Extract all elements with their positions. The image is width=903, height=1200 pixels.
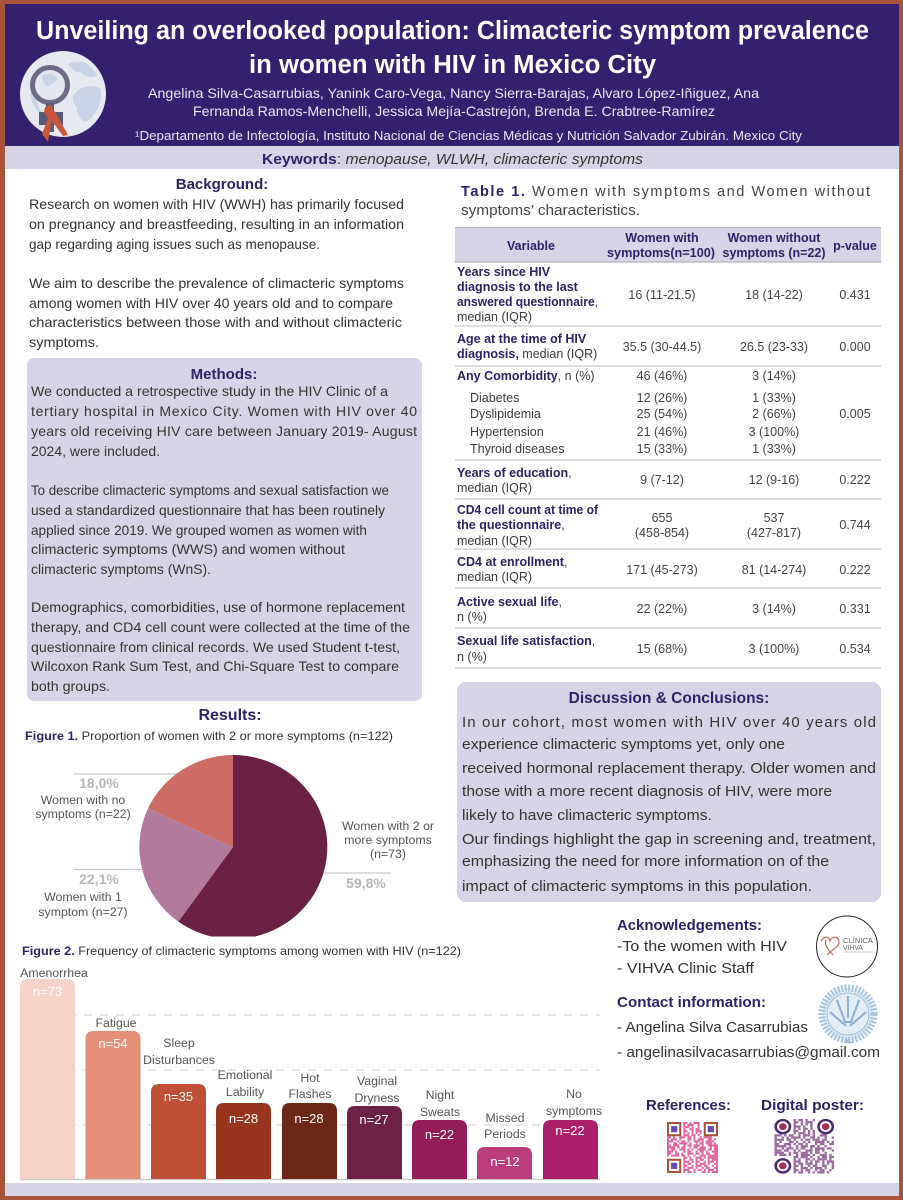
table: characteristics of women with and without symptoms bbox=[455, 227, 881, 668]
text block: methods bbox=[31, 383, 417, 694]
contact information bbox=[617, 994, 880, 1061]
row: CD4 at enrollment: 171 (45-273) bbox=[626, 563, 698, 577]
table header: symptoms (n=22) bbox=[722, 246, 826, 260]
label: one symptom bbox=[38, 871, 128, 919]
acknowledgements: -To the women with HIV bbox=[617, 939, 787, 955]
row: sexual life satisfaction bbox=[457, 634, 871, 664]
row: any comorbidity: 12 (26%) bbox=[637, 391, 687, 405]
icon: QR code references bbox=[667, 1123, 718, 1172]
digital poster QR code: Digital poster: bbox=[761, 1097, 864, 1114]
label: two or more symptoms: Women with 2 or bbox=[342, 819, 434, 833]
text block: methods: years old receiving HIV care between January 2019- August bbox=[31, 423, 417, 439]
row: sexual life satisfaction: 3 (100%) bbox=[749, 642, 799, 656]
label: no symptoms bbox=[35, 775, 131, 821]
row: any comorbidity: Hypertension bbox=[470, 425, 544, 439]
label: two or more symptoms bbox=[342, 819, 434, 891]
row: any comorbidity: Thyroid diseases bbox=[470, 442, 564, 456]
bar: no symptoms: symptoms bbox=[546, 1104, 602, 1118]
references QR code: References: bbox=[646, 1097, 731, 1114]
text block: methods: 2024, were included. bbox=[31, 443, 160, 459]
bar: sleep disturbances: n=35 bbox=[164, 1089, 193, 1104]
row: CD4 at questionnaire: 0.744 bbox=[839, 518, 871, 532]
bar: vaginal dryness: Vaginal bbox=[357, 1074, 397, 1088]
text block: background: characteristics between those with and without climacteric bbox=[29, 314, 402, 330]
row: any comorbidity: 21 (46%) bbox=[637, 425, 687, 439]
bar: vaginal dryness: n=27 bbox=[359, 1112, 389, 1127]
text block: background: on pregnancy and breastfeeding, resulting in an information bbox=[29, 216, 404, 232]
row: CD4 at questionnaire: the questionnaire, bbox=[457, 518, 565, 532]
bar: fatigue bbox=[86, 1016, 140, 1179]
bar chart: frequency of climacteric symptoms bbox=[20, 966, 602, 1180]
label: no symptoms: 18,0% bbox=[79, 775, 119, 791]
table header: Variable bbox=[507, 239, 555, 253]
row: years since diagnosis bbox=[457, 265, 871, 324]
row: years of education bbox=[457, 466, 871, 495]
text block: discussion: likely to have climacteric symptoms. bbox=[462, 807, 712, 824]
row: CD4 at enrollment bbox=[457, 555, 871, 584]
pie slice: 2 or more symptoms bbox=[178, 755, 327, 939]
bar: emotional lability bbox=[216, 1068, 272, 1179]
acknowledgements bbox=[617, 917, 787, 977]
bar: fatigue: Fatigue bbox=[95, 1016, 137, 1030]
text block: discussion: received hormonal replacement therapy. Older women and bbox=[462, 760, 876, 777]
affiliation: ¹Departamento de Infectología, Instituto Nacional de Ciencias Médicas y Nutrición Salvador Zubirán. Mexico City bbox=[135, 128, 803, 143]
heading: discussion: Discussion & Conclusions: bbox=[569, 690, 769, 707]
bar: night sweats bbox=[412, 1088, 467, 1179]
table header: p-value bbox=[833, 239, 877, 253]
text block: background: gap regarding aging issues such as menopause. bbox=[29, 236, 320, 252]
row: years since diagnosis: 18 (14-22) bbox=[745, 288, 803, 302]
bar: hot flashes: Flashes bbox=[288, 1087, 332, 1101]
text block: background: symptoms. bbox=[29, 334, 99, 350]
row: active sexual life: Active sexual life, bbox=[457, 595, 562, 609]
row: CD4 at enrollment: 0.222 bbox=[839, 563, 871, 577]
row: CD4 at enrollment: 81 (14-274) bbox=[742, 563, 806, 577]
contact information: - angelinasilvacasarrubias@gmail.com bbox=[617, 1045, 880, 1061]
row: age at diagnosis: 0.000 bbox=[839, 340, 871, 354]
label: two or more symptoms: more symptoms bbox=[344, 833, 432, 847]
row: any comorbidity: 15 (33%) bbox=[637, 442, 687, 456]
row: any comorbidity: 3 (14%) bbox=[752, 369, 796, 383]
icon: clinica vihva logo: VIHVA bbox=[843, 945, 863, 952]
heading: results: Results: bbox=[198, 707, 262, 724]
row: years since diagnosis: Years since HIV bbox=[457, 265, 551, 279]
label: one symptom: Women with 1 bbox=[44, 890, 122, 904]
text block: methods: tertiary hospital in Mexico City. Women with HIV over 40 bbox=[31, 403, 417, 419]
row: any comorbidity: 2 (66%) bbox=[752, 407, 796, 421]
row: any comorbidity: 25 (54%) bbox=[637, 407, 687, 421]
row: active sexual life: 3 (14%) bbox=[752, 602, 796, 616]
row: sexual life satisfaction: 0.534 bbox=[839, 642, 871, 656]
bar: missed periods: Periods bbox=[484, 1127, 526, 1141]
row: active sexual life: 22 (22%) bbox=[637, 602, 687, 616]
row: years since diagnosis: answered questionnaire, bbox=[457, 295, 598, 309]
acknowledgements: Acknowledgements: bbox=[617, 917, 762, 934]
row: any comorbidity: Any Comorbidity, n (%) bbox=[457, 369, 595, 383]
bar: missed periods: Missed bbox=[486, 1111, 525, 1125]
text block: discussion: experience climacteric symptoms yet, only one bbox=[462, 736, 785, 753]
header banner bbox=[5, 4, 899, 146]
bar: amenorrhea bbox=[20, 966, 88, 1179]
title bbox=[36, 17, 869, 79]
text block: discussion: those with a more recent diagnosis of HIV, were more bbox=[462, 783, 832, 800]
row: years since diagnosis: diagnosis to the last bbox=[457, 280, 579, 294]
contact information: Contact information: bbox=[617, 994, 766, 1011]
label: one symptom: symptom (n=27) bbox=[38, 905, 128, 919]
bar: no symptoms: No bbox=[566, 1087, 582, 1101]
text block: background: We aim to describe the prevalence of climacteric symptoms bbox=[29, 275, 404, 291]
row: years of education: Years of education, bbox=[457, 466, 572, 480]
row: CD4 at questionnaire bbox=[457, 503, 871, 548]
contact information: - Angelina Silva Casarrubias bbox=[617, 1020, 808, 1036]
bar: hot flashes bbox=[282, 1071, 337, 1179]
row: age at diagnosis: diagnosis, median (IQR) bbox=[457, 347, 597, 361]
bar: amenorrhea: n=73 bbox=[33, 984, 62, 999]
bar: vaginal dryness bbox=[347, 1074, 402, 1179]
icon: clinica vihva logo: CLÍNICA bbox=[843, 936, 873, 945]
bar: emotional lability: Emotional bbox=[218, 1068, 272, 1082]
row: years of education: 12 (9-16) bbox=[749, 473, 799, 487]
icon: institutional seal bbox=[822, 988, 874, 1043]
bar: sleep disturbances bbox=[143, 1036, 215, 1179]
text block: discussion: emphasizing the need for more information on of the bbox=[462, 853, 829, 870]
references QR code bbox=[646, 1097, 731, 1172]
table header: symptoms(n=100) bbox=[607, 246, 715, 260]
bar: vaginal dryness: Dryness bbox=[354, 1091, 400, 1105]
text block: discussion: impact of climacteric symptoms in this population. bbox=[462, 878, 812, 895]
label: two or more symptoms: 59,8% bbox=[346, 875, 386, 891]
row: CD4 at questionnaire: CD4 cell count at time of bbox=[457, 503, 599, 517]
row: CD4 at questionnaire: 537 bbox=[764, 511, 784, 525]
label: no symptoms: Women with no bbox=[41, 793, 125, 807]
text block: methods: climacteric symptoms (WnS). bbox=[31, 561, 211, 577]
row: active sexual life: 0.331 bbox=[839, 602, 871, 616]
bar: amenorrhea: Amenorrhea bbox=[20, 966, 88, 980]
row: years since diagnosis: median (IQR) bbox=[457, 310, 532, 324]
table title bbox=[461, 184, 870, 219]
panel: background bbox=[29, 176, 404, 350]
text block: methods: questionnaire from clinical records. We used Student t-test, bbox=[31, 639, 400, 655]
acknowledgements: - VIHVA Clinic Staff bbox=[617, 961, 755, 977]
row: years since diagnosis: 16 (11-21.5) bbox=[628, 288, 696, 302]
pie slice: no symptoms bbox=[148, 755, 233, 847]
row: any comorbidity: 46 (46%) bbox=[637, 369, 687, 383]
row: age at diagnosis: Age at the time of HIV bbox=[457, 332, 587, 346]
icon: clinica vihva logo bbox=[816, 916, 878, 977]
panel: discussion and conclusions bbox=[457, 682, 881, 902]
bar: missed periods: n=12 bbox=[490, 1154, 520, 1169]
bar: night sweats: Sweats bbox=[420, 1105, 460, 1119]
text block: methods: Wilcoxon Rank Sum Test, and Chi-Square Test to compare bbox=[31, 658, 399, 674]
label: two or more symptoms: (n=73) bbox=[370, 847, 406, 861]
row: age at diagnosis bbox=[457, 332, 871, 361]
panel: methods bbox=[27, 358, 422, 701]
bar: hot flashes: Hot bbox=[300, 1071, 320, 1085]
row: years of education: 9 (7-12) bbox=[640, 473, 684, 487]
icon: globe with female symbol and ribbon bbox=[20, 51, 106, 142]
row: CD4 at enrollment: CD4 at enrollment, bbox=[457, 555, 567, 569]
bar: fatigue: n=54 bbox=[98, 1036, 128, 1051]
row: any comorbidity: 1 (33%) bbox=[752, 442, 796, 456]
label: no symptoms: symptoms (n=22) bbox=[35, 807, 131, 821]
heading: methods: Methods: bbox=[191, 366, 257, 383]
text block: methods: We conducted a retrospective study in the HIV Clinic of a bbox=[31, 383, 388, 399]
row: active sexual life bbox=[457, 595, 871, 624]
figure 1 caption: Figure 1. Proportion of women with 2 or more symptoms (n=122) bbox=[25, 729, 393, 743]
row: CD4 at questionnaire: (427-817) bbox=[747, 526, 801, 540]
row: any comorbidity: 0.005 bbox=[839, 407, 871, 421]
heading: background: Background: bbox=[176, 176, 268, 193]
row: any comorbidity: 3 (100%) bbox=[749, 425, 799, 439]
row: age at diagnosis: 26.5 (23-33) bbox=[740, 340, 808, 354]
table title: symptoms’ characteristics. bbox=[461, 203, 640, 219]
bar: no symptoms bbox=[543, 1087, 602, 1179]
table header: Women without bbox=[728, 231, 821, 245]
row: years since diagnosis: 0.431 bbox=[839, 288, 871, 302]
figure 2 caption: Figure 2. Frequency of climacteric symptoms among women with HIV (n=122) bbox=[22, 944, 461, 958]
title: in women with HIV in Mexico City bbox=[249, 51, 657, 79]
row: years of education: 0.222 bbox=[839, 473, 871, 487]
row: active sexual life: n (%) bbox=[457, 610, 487, 624]
row: sexual life satisfaction: 15 (68%) bbox=[637, 642, 687, 656]
text block: background: Research on women with HIV (WWH) has primarily focused bbox=[29, 196, 404, 212]
row: CD4 at questionnaire: (458-854) bbox=[635, 526, 689, 540]
text block: methods: therapy, and CD4 cell count were collected at the time of the bbox=[31, 619, 410, 635]
pie chart: proportion of women with symptoms bbox=[35, 755, 434, 939]
keywords band bbox=[5, 146, 899, 169]
keywords band: Keywords : menopause, WLWH, climacteric symptoms bbox=[262, 152, 643, 168]
text block: discussion: In our cohort, most women with HIV over 40 years old bbox=[462, 714, 876, 731]
bar: missed periods bbox=[477, 1111, 532, 1179]
title: Unveiling an overlooked population: Climacteric symptom prevalence bbox=[36, 17, 869, 45]
text block: background: among women with HIV over 40 years old and to compare bbox=[29, 295, 393, 311]
text block: discussion: Our findings highlight the gap in screening and, treatment, bbox=[462, 831, 876, 848]
text block: methods: climacteric symptoms (WWS) and women without bbox=[31, 541, 345, 557]
row: any comorbidity: Diabetes bbox=[470, 391, 519, 405]
authors: Fernanda Ramos-Menchelli, Jessica Mejía-Castrejón, Brenda E. Crabtree-Ramírez bbox=[193, 103, 715, 119]
text block: methods: both groups. bbox=[31, 678, 110, 694]
bar: sleep disturbances: Sleep bbox=[163, 1036, 195, 1050]
table title: Table 1. Women with symptoms and Women without bbox=[461, 184, 870, 200]
row: any comorbidity bbox=[457, 369, 871, 456]
bar: emotional lability: Lability bbox=[226, 1085, 265, 1099]
authors bbox=[148, 85, 759, 119]
table header bbox=[455, 227, 881, 262]
row: CD4 at enrollment: median (IQR) bbox=[457, 570, 532, 584]
row: any comorbidity: Dyslipidemia bbox=[470, 407, 541, 421]
text block: methods: Demographics, comorbidities, use of hormone replacement bbox=[31, 599, 405, 615]
bar: night sweats: n=22 bbox=[425, 1127, 454, 1142]
bar: emotional lability: n=28 bbox=[229, 1111, 258, 1126]
row: CD4 at questionnaire: median (IQR) bbox=[457, 534, 532, 548]
label: one symptom: 22,1% bbox=[79, 871, 119, 887]
bar: hot flashes: n=28 bbox=[294, 1111, 324, 1126]
row: age at diagnosis: 35.5 (30-44.5) bbox=[623, 340, 701, 354]
row: CD4 at questionnaire: 655 bbox=[652, 511, 672, 525]
bar: no symptoms: n=22 bbox=[555, 1123, 585, 1138]
authors: Angelina Silva-Casarrubias, Yanink Caro-Vega, Nancy Sierra-Barajas, Alvaro López-Iñiguez, Ana bbox=[148, 85, 759, 101]
bar: sleep disturbances: Disturbances bbox=[143, 1053, 215, 1067]
digital poster QR code bbox=[761, 1097, 864, 1172]
icon: QR code digital poster bbox=[774, 1120, 834, 1172]
table header: Women with bbox=[625, 231, 699, 245]
text block: methods: To describe climacteric symptoms and sexual satisfaction we bbox=[31, 482, 389, 498]
row: any comorbidity: 1 (33%) bbox=[752, 391, 796, 405]
row: years of education: median (IQR) bbox=[457, 481, 532, 495]
text block: methods: used a standardized questionnaire that has been routinely bbox=[31, 502, 385, 518]
text block: methods: applied since 2019. We grouped women as women with bbox=[31, 522, 367, 538]
text block: discussion bbox=[462, 714, 876, 895]
text block: background bbox=[29, 196, 404, 350]
pie slice: 1 symptom bbox=[139, 808, 233, 922]
row: sexual life satisfaction: n (%) bbox=[457, 650, 487, 664]
bar: night sweats: Night bbox=[426, 1088, 455, 1102]
row: sexual life satisfaction: Sexual life satisfaction, bbox=[457, 634, 595, 648]
